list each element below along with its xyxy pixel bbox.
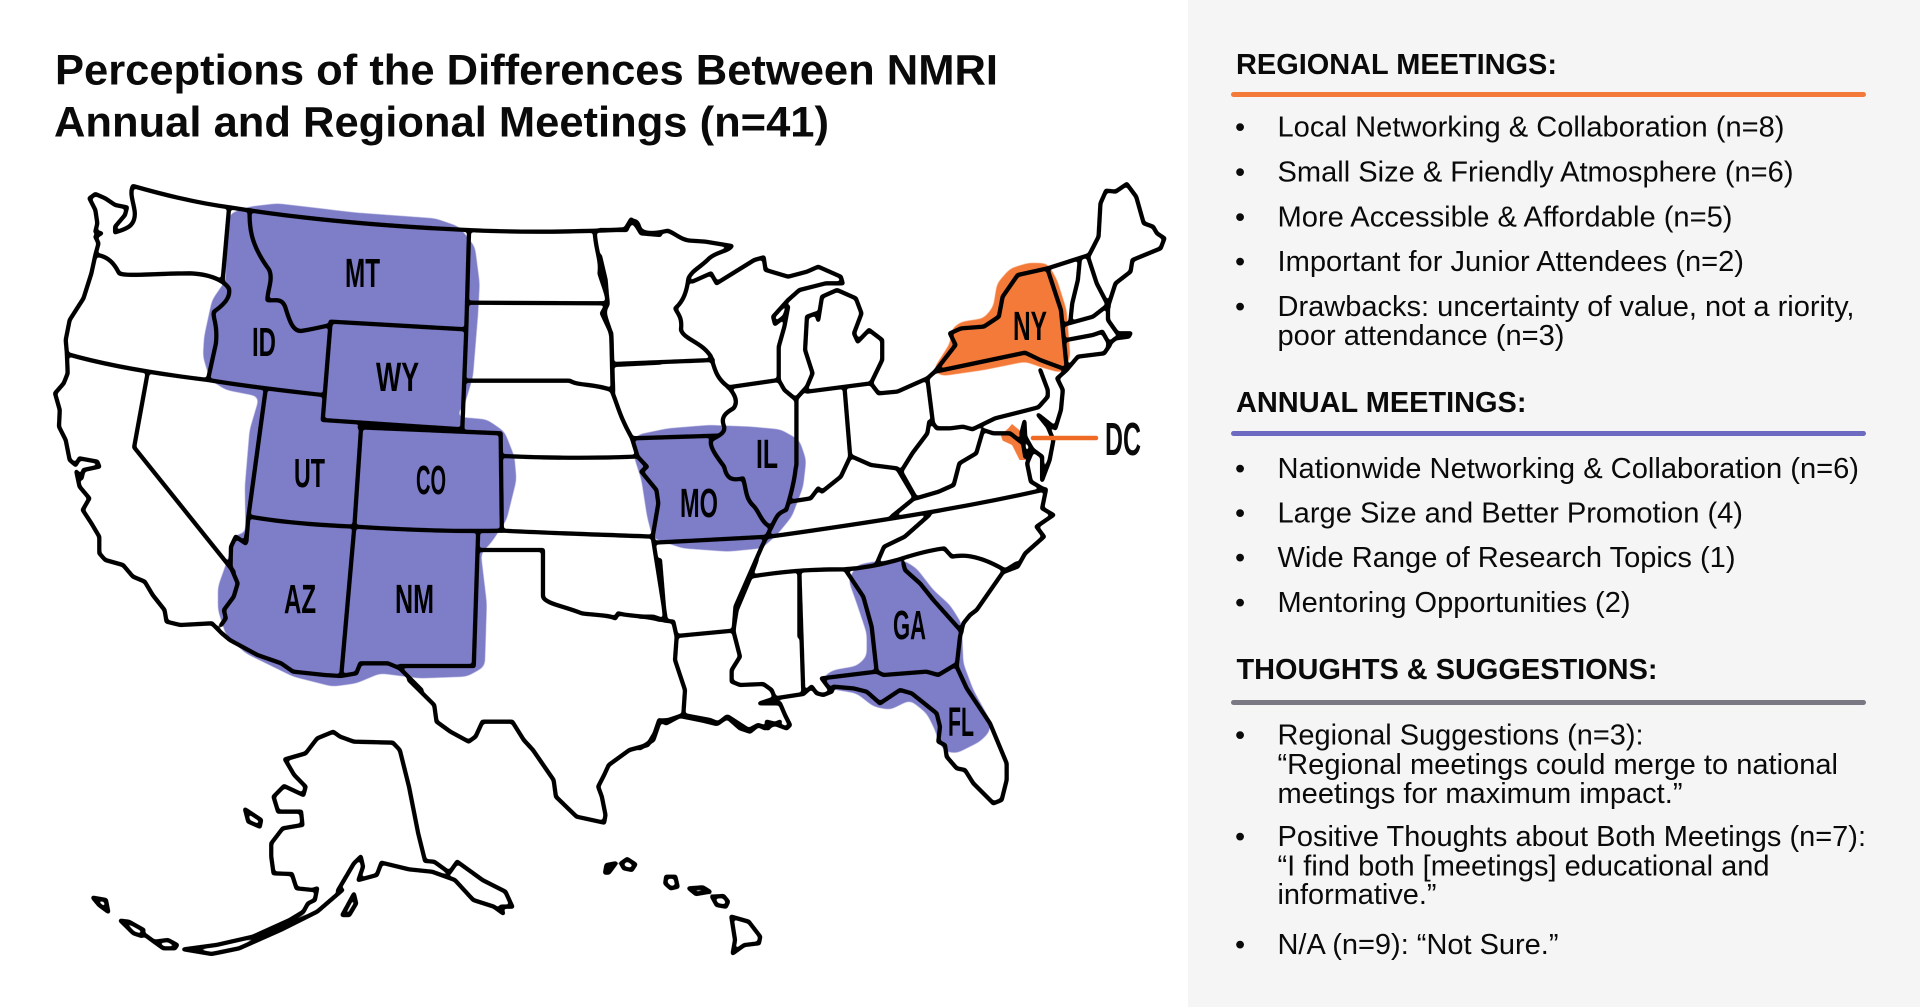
panel: thoughts and suggestions	[1231, 654, 1866, 961]
state labels: FL	[948, 699, 974, 745]
panel: regional meetings	[1231, 49, 1866, 352]
state labels: GA	[893, 602, 926, 648]
list: thoughts items: •	[1235, 821, 1245, 853]
list: annual meeting items: •	[1235, 542, 1245, 574]
list: regional meeting items: Important for Junior Attendees (n=2)	[1278, 246, 1744, 278]
highlight: western annual-meeting states	[203, 203, 516, 687]
highlight: New York	[933, 263, 1070, 376]
callout: DC label with leader line: DC	[1105, 413, 1141, 465]
list: regional meeting items: •	[1235, 202, 1245, 234]
list: regional meeting items: •	[1235, 157, 1245, 189]
state labels: CO	[416, 457, 446, 503]
state labels: AZ	[284, 576, 316, 622]
list: regional meeting items: More Accessible & Affordable (n=5)	[1278, 202, 1732, 234]
list: thoughts items: “Regional meetings could merge to national	[1278, 749, 1838, 781]
list: thoughts items: meetings for maximum impact.”	[1278, 778, 1682, 810]
state labels: IL	[756, 431, 778, 477]
highlight: Missouri and Illinois	[634, 425, 806, 552]
state outlines: west	[55, 186, 660, 690]
highlight: Washington DC	[1001, 424, 1025, 460]
list: thoughts items: Regional Suggestions (n=3):	[1278, 719, 1644, 751]
highlight: Georgia and Florida	[823, 560, 990, 753]
heading: annual meetings: ANNUAL MEETINGS:	[1236, 387, 1526, 419]
state labels: UT	[294, 450, 325, 496]
list: thoughts items	[1235, 719, 1866, 961]
state labels	[252, 250, 1047, 745]
list: thoughts items: Positive Thoughts about Both Meetings (n=7):	[1278, 821, 1866, 853]
Texas gulf coast	[409, 680, 780, 823]
list: regional meeting items: Local Networking & Collaboration (n=8)	[1278, 112, 1784, 144]
title: Perceptions of the Differences Between NMRI	[55, 47, 998, 94]
title	[54, 47, 998, 147]
state outlines: midwest and east	[600, 184, 1164, 637]
Hawaii	[605, 859, 760, 953]
list: regional meeting items: Drawbacks: uncertainty of value, not a riority,	[1278, 291, 1854, 323]
state labels: MT	[345, 250, 380, 296]
list: regional meeting items: •	[1235, 112, 1245, 144]
list: regional meeting items: •	[1235, 291, 1245, 323]
map of the United States	[55, 184, 1164, 954]
state labels: MO	[680, 480, 718, 526]
heading: thoughts and suggestions: THOUGHTS & SUGGESTIONS:	[1236, 654, 1658, 686]
title: Annual and Regional Meetings (n=41)	[54, 100, 829, 147]
list: annual meeting items: •	[1235, 587, 1245, 619]
callout: DC label with leader line	[1033, 413, 1141, 465]
state labels: WY	[376, 354, 419, 400]
state labels: NY	[1013, 303, 1047, 349]
list: annual meeting items: •	[1235, 498, 1245, 530]
highlighted regions	[203, 203, 1070, 753]
list: annual meeting items: Wide Range of Research Topics (1)	[1278, 542, 1736, 574]
list: annual meeting items: Nationwide Networking & Collaboration (n=6)	[1278, 453, 1859, 485]
list: annual meeting items: Mentoring Opportunities (2)	[1278, 587, 1630, 619]
list: thoughts items: “I find both [meetings] educational and	[1278, 851, 1770, 883]
state labels: NM	[395, 576, 434, 622]
list: thoughts items: •	[1235, 719, 1245, 751]
list: regional meeting items: poor attendance (n=3)	[1278, 320, 1564, 352]
list: regional meeting items: •	[1235, 246, 1245, 278]
list: annual meeting items: Large Size and Better Promotion (4)	[1278, 498, 1743, 530]
panel: annual meetings	[1231, 387, 1866, 619]
list: annual meeting items	[1235, 453, 1859, 619]
list: annual meeting items: •	[1235, 453, 1245, 485]
state outlines: gulf coast and Florida	[640, 560, 1017, 803]
list: thoughts items: informative.”	[1278, 879, 1436, 911]
state and territory outlines	[55, 184, 1164, 954]
list: thoughts items: •	[1235, 929, 1245, 961]
list: regional meeting items	[1235, 112, 1854, 352]
Alaska	[93, 732, 512, 954]
list: thoughts items: N/A (n=9): “Not Sure.”	[1278, 929, 1558, 961]
list: regional meeting items: Small Size & Friendly Atmosphere (n=6)	[1278, 157, 1794, 189]
heading: regional meetings: REGIONAL MEETINGS:	[1236, 49, 1557, 81]
state labels: ID	[252, 319, 276, 365]
